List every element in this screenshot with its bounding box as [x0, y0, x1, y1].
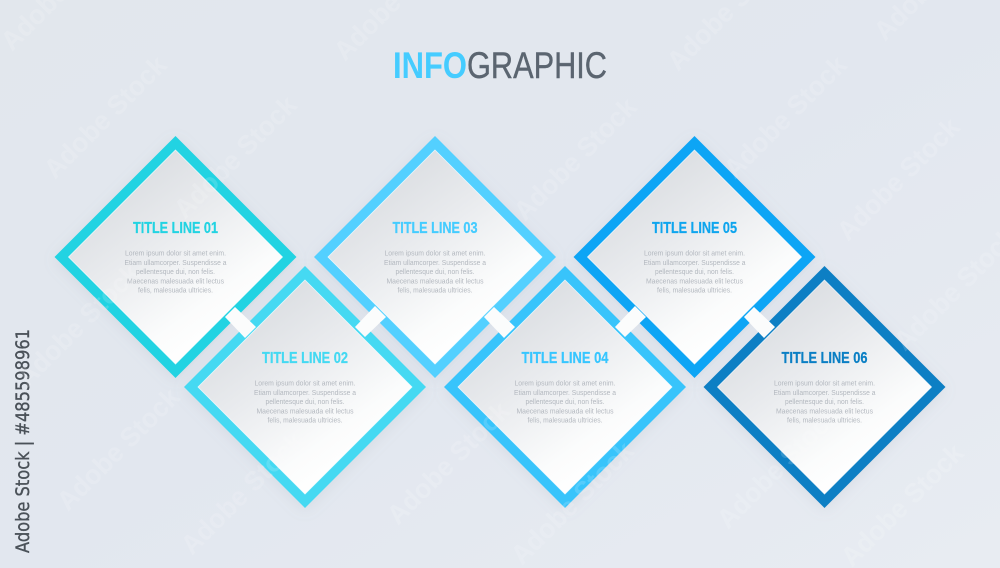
watermarks: Adobe Stock [11, 257, 146, 392]
panel: item 02: TITLE LINE 02 [262, 350, 348, 367]
panel: item 03: TITLE LINE 03 [392, 220, 478, 237]
panel: item 03: Lorem ipsum dolor sit amet enim. [384, 248, 486, 258]
panel: item 04: felis, malesuada ultricies. [528, 416, 602, 425]
title: INFO [393, 45, 467, 86]
panel: item 05: Lorem ipsum dolor sit amet enim. [644, 248, 745, 258]
panel: item 03: pellentesque dui, non felis. [396, 267, 474, 276]
panel: item 05: Etiam ullamcorper. Suspendisse a [644, 258, 746, 267]
watermarks: Adobe Stock [508, 91, 643, 226]
panel: item 01: Etiam ullamcorper. Suspendisse a [124, 258, 227, 267]
watermarks: Adobe Stock [718, 49, 853, 184]
panel: item 02: Etiam ullamcorper. Suspendisse a [254, 388, 357, 397]
panel: item 06 [704, 266, 946, 508]
panel: item 03: Maecenas malesuada elit lectus [386, 276, 484, 285]
watermarks: Adobe Stock [831, 111, 966, 246]
watermarks: Adobe Stock [38, 49, 173, 184]
panel: item 02: felis, malesuada ultricies. [268, 416, 342, 425]
watermarks: Adobe Stock [381, 395, 516, 530]
panel: item 04 [444, 266, 686, 508]
panel: item 05: TITLE LINE 05 [652, 220, 737, 237]
panel: item 06: TITLE LINE 06 [782, 350, 868, 367]
panel: item 06: felis, malesuada ultricies. [787, 416, 862, 425]
side label: stock id: Adobe Stock | #485598961 [12, 329, 34, 553]
panel: item 06: pellentesque dui, non felis. [785, 397, 864, 406]
watermarks: Adobe Stock [175, 425, 310, 560]
panel: item 06: Lorem ipsum dolor sit amet enim. [774, 378, 875, 388]
panel: item 04: Lorem ipsum dolor sit amet enim. [514, 378, 616, 388]
watermarks: Adobe Stock [505, 435, 640, 568]
panel: item 04: TITLE LINE 04 [522, 350, 609, 367]
panel: item 05 [574, 136, 816, 378]
panel: item 01 [54, 136, 296, 378]
panel: item 01: Lorem ipsum dolor sit amet enim. [125, 248, 226, 258]
panel: item 05: pellentesque dui, non felis. [655, 267, 734, 276]
watermarks: Adobe Stock [168, 89, 303, 224]
panel: item 04: Etiam ullamcorper. Suspendisse a [514, 388, 617, 397]
panel: item 03: Etiam ullamcorper. Suspendisse a [384, 258, 487, 267]
panel: item 04: Maecenas malesuada elit lectus [516, 406, 614, 415]
connectors between items [225, 306, 775, 338]
panel: item 05: felis, malesuada ultricies. [657, 286, 732, 295]
panel: item 02: Lorem ipsum dolor sit amet enim. [254, 378, 356, 388]
panel: item 01: TITLE LINE 01 [133, 220, 218, 237]
panel: item 06: Maecenas malesuada elit lectus [776, 406, 873, 415]
panel: item 04: pellentesque dui, non felis. [526, 397, 604, 406]
panel: item 01: felis, malesuada ultricies. [138, 286, 213, 295]
watermarks: Adobe Stock [711, 399, 846, 534]
panel: item 01: Maecenas malesuada elit lectus [127, 276, 224, 285]
title: GRAPHIC [467, 45, 607, 86]
panel: item 03 [314, 136, 556, 378]
panel: item 02: pellentesque dui, non felis. [266, 397, 344, 406]
watermarks: Adobe Stock [51, 381, 186, 516]
panel: item 02 [184, 266, 426, 508]
panel: item 01: pellentesque dui, non felis. [136, 267, 215, 276]
panel: item 03: felis, malesuada ultricies. [398, 286, 472, 295]
panel: item 02: Maecenas malesuada elit lectus [256, 406, 354, 415]
panel: item 05: Maecenas malesuada elit lectus [646, 276, 743, 285]
panel: item 06: Etiam ullamcorper. Suspendisse a [774, 388, 876, 397]
title [393, 45, 607, 86]
